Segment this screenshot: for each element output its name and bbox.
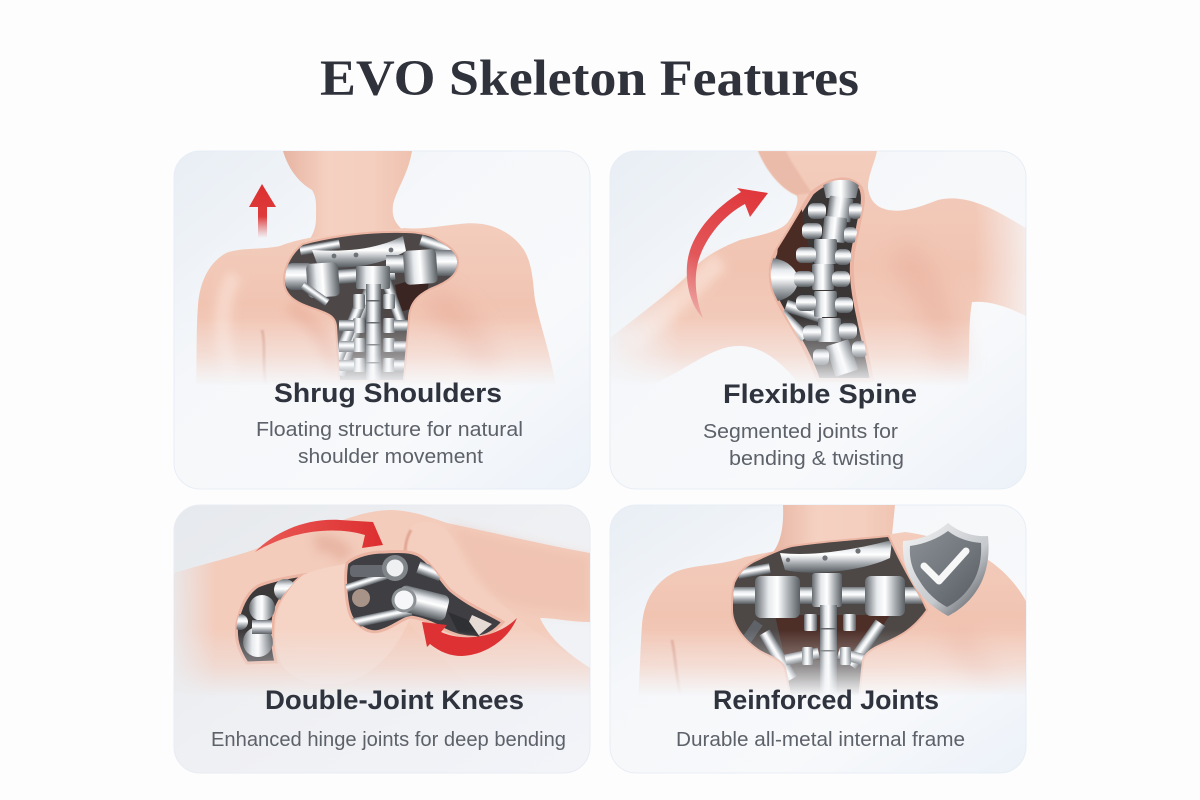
heading: Shrug Shoulders [274,378,502,408]
description: Segmented joints for [703,421,898,443]
arrow: up [249,184,276,238]
neck [283,151,412,238]
illustration: bent knee with double joint [174,510,590,700]
metal frame [283,232,463,382]
center joint opening [346,551,503,637]
neck [774,505,895,552]
panel: Double-Joint Knees [174,505,590,773]
illustration: back with exposed spine [610,151,1026,385]
shoulders [196,223,556,385]
spine segments [770,180,866,376]
title: EVO Skeleton Features [320,51,859,107]
arrow: curved up-right [687,188,768,318]
opening [733,537,926,700]
leg [174,510,590,700]
panel: Shrug Shoulders [174,151,590,489]
icon: shield with check [903,523,989,616]
arrow: lower curved [422,618,517,656]
description: Durable all-metal internal frame [676,729,965,751]
metal frame [733,537,926,694]
center joint metal [345,555,492,637]
heading: Double-Joint Knees [265,685,524,715]
left knee metal [236,579,294,657]
back, neck and arm [610,151,1026,385]
description: Floating structure for natural [256,419,523,441]
left knee opening [236,575,303,663]
opening lip [285,233,457,380]
illustration: shoulders with exposed metal skeleton [196,151,556,385]
description: Enhanced hinge joints for deep bending [211,729,566,751]
illustration: shoulders with reinforced metal frame [638,505,1030,705]
heading: Flexible Spine [723,379,917,409]
description: shoulder movement [298,446,483,468]
shoulders [638,532,1030,700]
arrow: upper curved [255,520,383,552]
panel: Flexible Spine [610,151,1026,489]
lower thigh pad [276,564,408,647]
description: bending & twisting [729,448,904,470]
spine opening [771,179,872,380]
panel: Reinforced Joints [610,505,1030,773]
heading: Reinforced Joints [713,685,939,715]
